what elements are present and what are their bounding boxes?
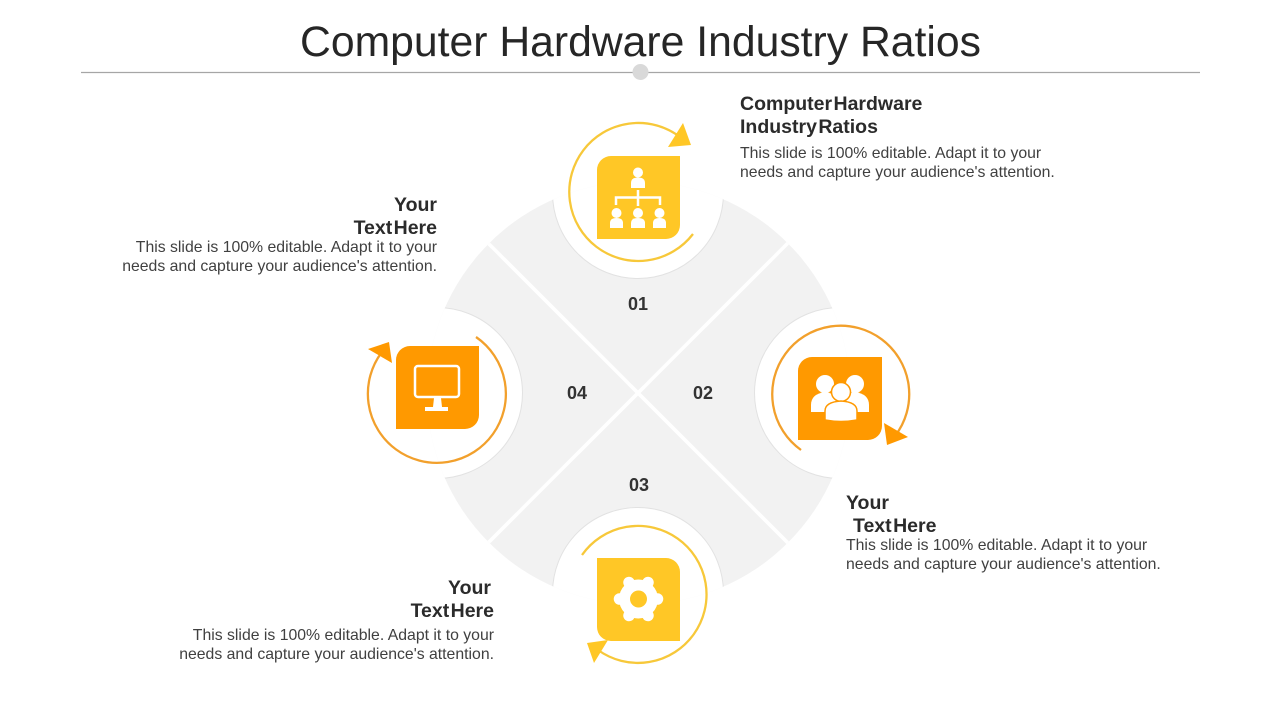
text block: step 1 xyxy=(740,93,1055,181)
title: Computer Hardware Industry Ratios xyxy=(300,18,981,66)
step 3 ring arrow xyxy=(582,526,707,663)
title divider xyxy=(81,64,1200,80)
text block: step 3: Text Here xyxy=(411,600,494,622)
central graphic xyxy=(81,64,1200,664)
text block: step 4: Your xyxy=(394,194,437,216)
text block: step 1: Computer Hardware xyxy=(740,93,922,115)
segment numbers: 04 xyxy=(567,383,587,403)
text block: step 2: Your xyxy=(846,492,889,514)
step 2 icon: people xyxy=(798,357,882,440)
segment numbers: 03 xyxy=(629,475,649,495)
text block: step 4 xyxy=(122,194,437,275)
text block: step 2 xyxy=(846,492,1161,573)
step 4 ring arrow xyxy=(368,337,506,463)
step 1 icon: organisation chart xyxy=(597,156,680,239)
text block: step 4: needs and capture your audience's attention. xyxy=(122,258,437,275)
text block: step 1: Industry Ratios xyxy=(740,116,878,138)
text block: step 1: This slide is 100% editable. Adapt it to your xyxy=(740,145,1041,162)
text block: step 4: This slide is 100% editable. Adapt it to your xyxy=(136,239,437,256)
text block: step 3: needs and capture your audience's attention. xyxy=(179,646,494,663)
text block: step 3: This slide is 100% editable. Adapt it to your xyxy=(193,627,494,644)
segment numbers: 02 xyxy=(693,383,713,403)
segment numbers xyxy=(567,294,713,495)
text block: step 2: Text Here xyxy=(853,515,936,537)
text block: step 4: Text Here xyxy=(354,217,437,239)
step 1 ring arrow xyxy=(569,123,693,261)
text block: step 3 xyxy=(179,577,494,663)
text block: step 1: needs and capture your audience's attention. xyxy=(740,164,1055,181)
segmented disc xyxy=(444,199,832,587)
text block: step 3: Your xyxy=(448,577,491,599)
text block: step 2: This slide is 100% editable. Adapt it to your xyxy=(846,537,1147,554)
step 3 icon: gear xyxy=(597,558,680,641)
step 2 ring arrow xyxy=(772,326,909,450)
segment numbers: 01 xyxy=(628,294,648,314)
step 4 icon: monitor xyxy=(396,346,479,429)
text block: step 2: needs and capture your audience's attention. xyxy=(846,556,1161,573)
